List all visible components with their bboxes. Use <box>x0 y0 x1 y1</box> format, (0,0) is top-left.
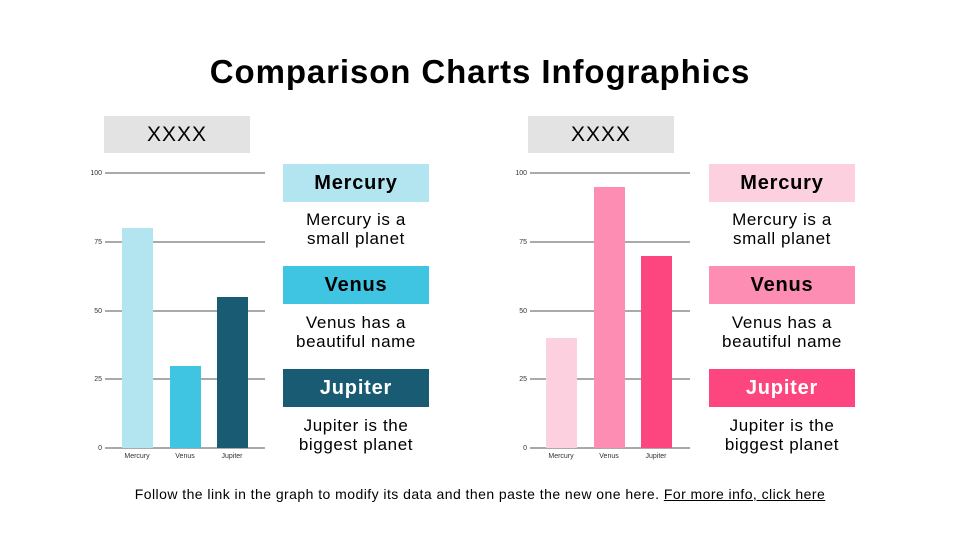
text: Mercury: Mercury is a <box>732 210 832 229</box>
bar chart: right: 100 <box>515 170 527 177</box>
text: Venus <box>296 313 416 351</box>
label: Mercury: Mercury <box>740 172 824 194</box>
text: Mercury <box>732 210 832 248</box>
bar chart: right: 25 <box>519 376 527 383</box>
text: Jupiter: Jupiter is the <box>730 416 834 435</box>
header: right: XXXX <box>571 123 631 146</box>
header: right <box>528 116 674 153</box>
header: left <box>104 116 250 153</box>
label: Venus <box>283 266 429 304</box>
text: Mercury: small planet <box>307 229 405 248</box>
label: Mercury <box>283 164 429 202</box>
bar chart: right: Jupiter <box>645 453 667 460</box>
bar chart: left: 75 <box>94 239 102 246</box>
label: Jupiter: Jupiter <box>320 377 392 399</box>
text: Venus <box>722 313 842 351</box>
bar chart: left: 100 <box>90 170 102 177</box>
text: Venus: beautiful name <box>296 332 416 351</box>
text: Jupiter <box>299 416 413 454</box>
legend: left <box>283 164 429 454</box>
bar chart: left <box>90 170 265 460</box>
label: Mercury: Mercury <box>314 172 398 194</box>
bar chart: left: Mercury <box>124 453 150 460</box>
label: Venus <box>709 266 855 304</box>
bar chart: left: 25 <box>94 376 102 383</box>
bar chart: left: Jupiter <box>221 453 243 460</box>
bar chart: right <box>515 170 690 460</box>
text: Jupiter: biggest planet <box>299 435 413 454</box>
text: Mercury <box>306 210 406 248</box>
bar chart: right: 75 <box>519 239 527 246</box>
bar chart: left: 50 <box>94 308 102 315</box>
text: Venus: Venus has a <box>306 313 406 332</box>
label: Jupiter <box>283 369 429 407</box>
text: Mercury: small planet <box>733 229 831 248</box>
text: Jupiter <box>725 416 839 454</box>
label: Jupiter <box>709 369 855 407</box>
bar chart: right: Mercury <box>548 453 574 460</box>
bar chart: right: 50 <box>519 308 527 315</box>
label: Venus: Venus <box>751 274 813 296</box>
label: Jupiter: Jupiter <box>746 377 818 399</box>
title: Comparison Charts Infographics <box>210 53 750 90</box>
text: Jupiter: biggest planet <box>725 435 839 454</box>
text: Venus: beautiful name <box>722 332 842 351</box>
legend: right <box>709 164 855 454</box>
label: Mercury <box>709 164 855 202</box>
text: Jupiter: Jupiter is the <box>304 416 408 435</box>
bar chart: right: Venus <box>599 453 619 460</box>
text: Mercury: Mercury is a <box>306 210 406 229</box>
footer: Follow the link in the graph to modify its data and then paste the new one here. For more info, click here <box>135 486 825 502</box>
text: Venus: Venus has a <box>732 313 832 332</box>
bar chart: right: 0 <box>523 445 527 452</box>
bar chart: left: Venus <box>175 453 195 460</box>
label: Venus: Venus <box>325 274 387 296</box>
header: left: XXXX <box>147 123 207 146</box>
bar chart: left: 0 <box>98 445 102 452</box>
